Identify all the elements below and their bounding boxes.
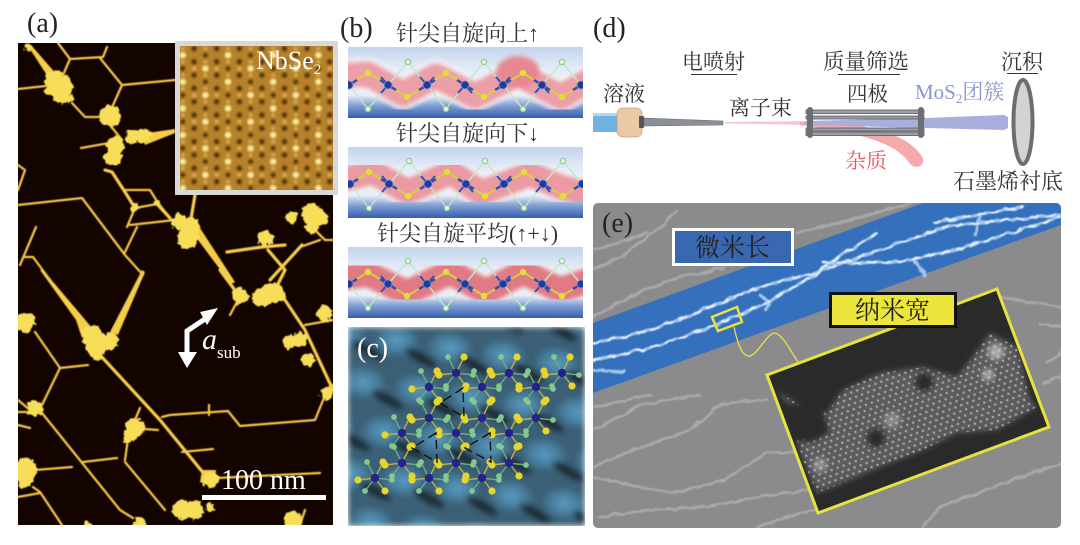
scale bar 100 nm bbox=[202, 470, 326, 500]
label: ion beam: 离子束 bbox=[729, 96, 792, 120]
panel d: mass-selected deposition schematic bbox=[593, 50, 1063, 194]
scale bar 100 nm: 100 nm bbox=[221, 465, 306, 496]
map: spin average bbox=[340, 247, 590, 318]
label box: micrometer long: 微米长 bbox=[695, 234, 770, 262]
label: MoS2 clusters: MoS bbox=[915, 80, 956, 104]
label a_sub: a bbox=[202, 323, 217, 356]
quadrupole bbox=[806, 107, 924, 138]
stage label: mass filtering: 质量筛选 bbox=[823, 50, 909, 74]
label box: nanometer wide: 纳米宽 bbox=[855, 297, 930, 325]
graphene substrate disk bbox=[1014, 80, 1032, 164]
ribbon strands bbox=[593, 203, 1061, 527]
stage label: electrospray: 电喷射 bbox=[682, 50, 745, 74]
label box: nanometer wide bbox=[830, 294, 956, 326]
panel label (e): (e) bbox=[602, 208, 633, 239]
panel label (b): (b) bbox=[340, 13, 373, 44]
panel label (c): (c) bbox=[357, 333, 388, 364]
panel e: STEM image of nanoribbons bbox=[593, 203, 1061, 528]
label: impurity: 杂质 bbox=[845, 149, 887, 173]
label a_sub: sub bbox=[217, 343, 241, 362]
heading: tip spin down: 针尖自旋向下↓ bbox=[396, 121, 539, 146]
panel label (d): (d) bbox=[593, 13, 626, 44]
heading: tip spin average: 针尖自旋平均(↑+↓) bbox=[377, 221, 558, 246]
label: solution: 溶液 bbox=[603, 82, 645, 106]
inset label NbSe2: 2 bbox=[314, 62, 321, 78]
arrows: substrate lattice directions bbox=[178, 308, 218, 368]
ion beam bbox=[725, 121, 810, 125]
map: spin up bbox=[340, 47, 590, 118]
label: MoS2 clusters: 2 bbox=[956, 91, 962, 106]
micrometer-long band highlight bbox=[593, 203, 1061, 393]
zoomed inset: atomic-resolution image bbox=[760, 285, 1055, 520]
inset label NbSe2: NbSe bbox=[256, 46, 314, 75]
zoom marker rectangle and connector bbox=[712, 307, 798, 362]
panel b: spin-resolved density maps bbox=[340, 21, 590, 318]
label box: micrometer long bbox=[674, 230, 792, 264]
panel label (a): (a) bbox=[27, 8, 58, 39]
stage label: deposition: 沉积 bbox=[1001, 50, 1044, 74]
label: MoS2 clusters: 团簇 bbox=[962, 80, 1004, 104]
impurity beam bbox=[800, 122, 923, 167]
panel c: DFT simulation with atomic model bbox=[348, 327, 585, 526]
panel a: AFM image of NbSe2 nanoribbons bbox=[13, 43, 334, 532]
syringe bbox=[593, 108, 723, 137]
inset: NbSe2 STM image bbox=[175, 41, 337, 195]
dashed triangles bbox=[412, 388, 491, 462]
label: quadrupole: 四极 bbox=[847, 83, 888, 106]
atomic lattice model bbox=[354, 353, 582, 495]
heading: tip spin up: 针尖自旋向上↑ bbox=[396, 21, 539, 46]
MoS2 cluster beam bbox=[805, 115, 1008, 130]
map: spin down bbox=[340, 147, 590, 218]
label: graphene substrate: 石墨烯衬底 bbox=[953, 169, 1063, 194]
